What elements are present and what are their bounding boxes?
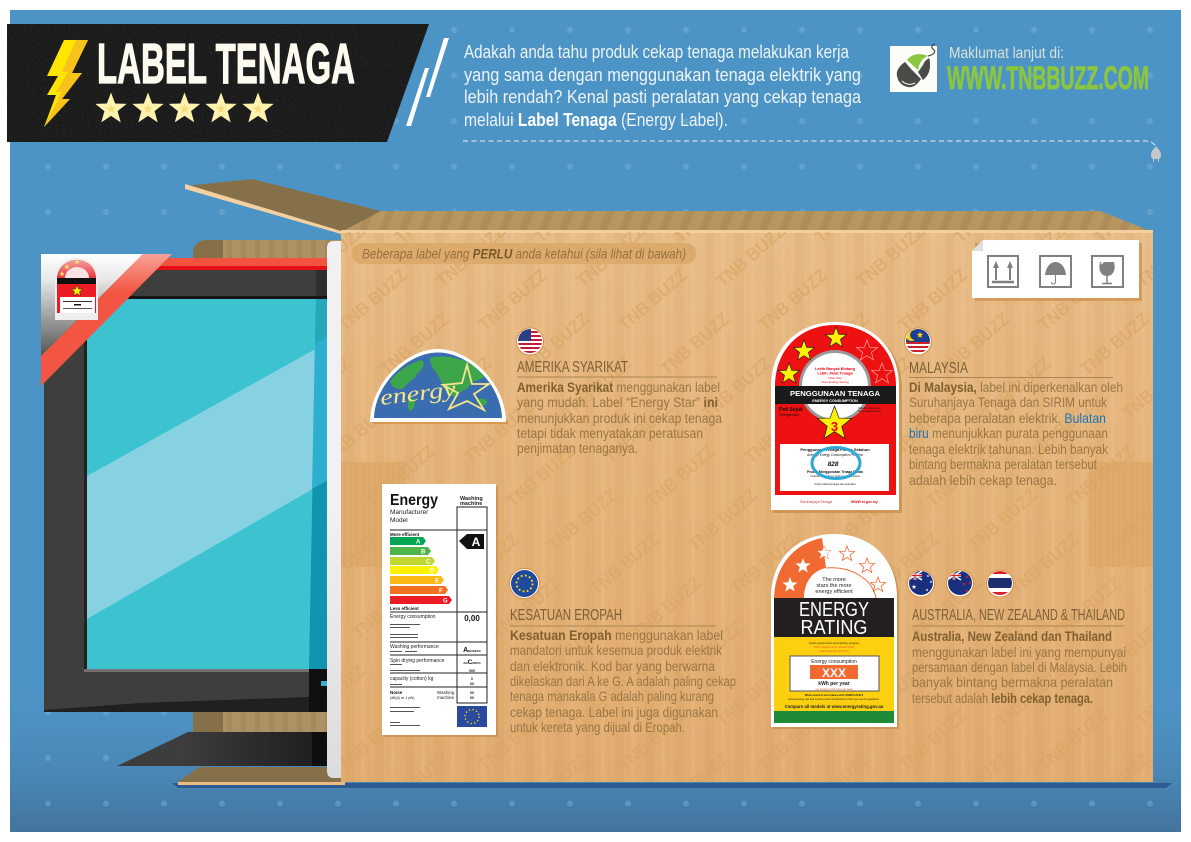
malaysia energy label: PENGGUNAAN TENAGA xyxy=(790,389,881,398)
australia energy rating label: stars the more xyxy=(816,583,852,589)
energy star label xyxy=(370,349,508,424)
EU energy label: machine xyxy=(437,695,455,700)
text: Malaysia xyxy=(909,360,1123,488)
text: Australia, New Zealand and Thailand: banyak bintang bermakna peralatan xyxy=(912,674,1113,690)
flag: New Zealand xyxy=(946,570,974,597)
flag: USA xyxy=(516,328,544,355)
malaysia energy label xyxy=(770,320,902,513)
text: Malaysia: biru menunjukkan purata penggunaan xyxy=(909,425,1108,441)
semicircle window: Lebih Jimat Tenaga xyxy=(817,372,853,376)
text: Australia, New Zealand and Thailand: persamaan dengan label di Malaysia. Lebih xyxy=(912,659,1127,675)
text: Kesatuan Eropah: mandatori untuk kesemua produk elektrik xyxy=(510,642,723,658)
website callout: Maklumat lanjut di: xyxy=(949,45,1064,62)
australia energy rating label: kWh per year xyxy=(818,681,850,687)
EU energy label: Noise xyxy=(390,690,403,695)
EU energy label: Manufacturer xyxy=(390,509,429,516)
television xyxy=(44,258,330,766)
efficiency bars A to G: G xyxy=(443,598,448,604)
slashes xyxy=(406,38,449,126)
australia energy rating label xyxy=(770,530,900,730)
text: Amerika Syarikat: AMERIKA SYARIKAT xyxy=(517,359,628,376)
text: Kesatuan Eropah: dikelaskan dari A ke G. A adalah paling cekap xyxy=(510,673,736,689)
australia energy rating label: RATING xyxy=(800,617,868,639)
dashed cord with plug xyxy=(463,141,1161,162)
text: Kesatuan Eropah: untuk kereta yang dijual di Eropah. xyxy=(510,719,685,735)
text: Australia, New Zealand and Thailand xyxy=(912,607,1127,706)
rating stars xyxy=(779,327,892,383)
text: Amerika Syarikat: Amerika Syarikat menggunakan label xyxy=(517,379,720,395)
semicircle window xyxy=(799,350,871,422)
text: Kesatuan Eropah: dan elektronik. Kod bar yang berwarna xyxy=(510,658,715,674)
EU energy label: machine xyxy=(460,501,482,507)
malaysia energy label: Average Energy Consumption Per Year xyxy=(806,453,864,457)
flag: EU xyxy=(510,568,540,598)
australia energy rating label: Actual energy use and running costs will depend on how you use the appliance. xyxy=(788,697,880,701)
australia energy rating label: A joint government and industry program xyxy=(809,641,860,645)
five stars rating xyxy=(95,92,274,122)
icon: keep dry umbrella xyxy=(1040,256,1071,287)
EU energy label: Washing performance xyxy=(390,644,439,650)
text: Amerika Syarikat: menunjukkan produk ini cekap tenaga xyxy=(517,410,722,426)
text: Kesatuan Eropah: tenaga manakala G adalah paling kurang xyxy=(510,688,714,704)
corner ribbon with mini label xyxy=(41,254,172,386)
text: Kesatuan Eropah: Kesatuan Eropah menggunakan label xyxy=(510,627,723,643)
text: Amerika Syarikat: yang mudah. Label “Energy Star” ini xyxy=(517,394,718,410)
malaysia energy label: Refrigerator xyxy=(779,413,800,417)
energy star logo: energy xyxy=(379,376,457,410)
EU energy label: More efficient xyxy=(390,532,420,537)
EU energy label: Energy xyxy=(390,492,438,509)
blue circle highlight xyxy=(812,448,860,478)
EU energy label: 0 xyxy=(471,677,473,681)
EU energy label: capacity (cotton) kg xyxy=(390,676,434,682)
australia energy rating label: energy efficient xyxy=(815,589,853,595)
malaysia energy label: 3 xyxy=(831,419,838,434)
tv screen xyxy=(87,299,330,669)
malaysia energy label: Untuk maklumat lanjut sila rujuk label xyxy=(814,483,856,486)
cardboard box front xyxy=(341,230,1153,782)
efficiency bars A to G: F xyxy=(439,588,443,594)
australia energy rating label: XXX xyxy=(822,666,846,680)
malaysia energy label: Suruhanjaya Tenaga xyxy=(800,500,832,504)
EU energy label: Model xyxy=(390,517,408,524)
EU energy label: Washing xyxy=(460,496,483,502)
semicircle window: More Star xyxy=(828,376,842,380)
malaysia energy label: 828 xyxy=(828,461,839,468)
malaysia energy label: Penggunaan Tenaga Purata Setahun xyxy=(800,447,870,452)
title banner xyxy=(7,24,429,142)
icon: computer mouse xyxy=(890,44,937,92)
EU energy label: A xyxy=(472,535,481,549)
flag: Australia xyxy=(908,570,935,597)
EU energy label: 0,00 xyxy=(464,614,480,623)
title: LABEL TENAGA xyxy=(97,32,355,96)
box back interior xyxy=(178,240,345,785)
website callout xyxy=(947,45,1149,96)
intro paragraph: Adakah anda tahu produk cekap tenaga melakukan kerja xyxy=(464,42,850,62)
EU energy label: ABCDEFG xyxy=(463,647,482,654)
text: Amerika Syarikat xyxy=(517,359,722,456)
malaysia energy label: Suhu sentiasa sama xyxy=(858,410,881,413)
map continents xyxy=(390,357,487,411)
malaysia energy label: WWW.st.gov.my xyxy=(851,500,878,504)
australia energy rating label: ENERGY xyxy=(799,599,869,621)
malaysia energy label: ENERGY CONSUMPTION xyxy=(812,399,858,403)
intro paragraph xyxy=(464,42,862,130)
mini malaysia label xyxy=(55,258,98,320)
open box flap xyxy=(185,179,381,234)
efficiency bars A to G: B xyxy=(421,550,426,556)
text: Amerika Syarikat: penjimatan tenaganya. xyxy=(517,440,638,456)
text: Kesatuan Eropah: KESATUAN EROPAH xyxy=(510,607,622,624)
malaysia energy label: Cuterbur maksimum xyxy=(858,407,881,410)
efficiency bars A to G: C xyxy=(426,560,431,566)
text: Australia, New Zealand and Thailand: tersebut adalah lebih cekap tenaga. xyxy=(912,690,1093,706)
text: Amerika Syarikat: tetapi tidak menyatakan peratusan xyxy=(517,425,703,441)
text: Malaysia: MALAYSIA xyxy=(909,360,969,377)
handling note with icons xyxy=(972,240,1142,301)
malaysia energy label: Cuterbur maksimum Suhu sentiasa sama xyxy=(810,474,860,478)
EU energy label: Energy consumption xyxy=(390,614,436,620)
icon: this way up xyxy=(988,256,1018,287)
subtitle pill: Beberapa label yang PERLU anda ketahui (sila lihat di bawah) xyxy=(362,246,686,262)
efficiency bars A to G: A xyxy=(416,540,421,546)
malaysia energy label: Produk Menggunakan Tenaga Purata xyxy=(807,470,863,474)
label grid xyxy=(390,507,487,703)
intro paragraph: lebih rendah? Kenal pasti peralatan yang cekap tenaga xyxy=(464,87,862,107)
efficiency bars A to G: E xyxy=(435,578,439,584)
text: Kesatuan Eropah: cekap tenaga. Label ini juga digunakan xyxy=(510,704,718,720)
tv side panel xyxy=(327,241,343,778)
australia energy rating label: When tested in accordance with AS/NZS 2442.2 xyxy=(805,693,864,697)
text: Kesatuan Eropah xyxy=(510,607,736,735)
text: Australia, New Zealand and Thailand: Australia, New Zealand dan Thailand xyxy=(912,628,1112,644)
intro paragraph: yang sama dengan menggunakan tenaga elektrik yang xyxy=(464,65,861,85)
EU energy label: Less efficient xyxy=(390,606,419,611)
EU energy label: 00 xyxy=(470,696,474,700)
EU energy label: (dB(A) re 1 pW) xyxy=(390,696,415,700)
EU energy label: 000 xyxy=(469,669,475,673)
semicircle window: More Energy Saving xyxy=(821,380,849,384)
icon: lightning bolt xyxy=(44,40,88,127)
malaysia energy label: Peti Sejuk xyxy=(779,407,803,413)
text: Malaysia: tenaga elektrik tahunan. Lebih banyak xyxy=(909,441,1109,457)
icon: fragile glass xyxy=(1092,256,1123,287)
australia energy rating label: Energy consumption xyxy=(811,659,857,665)
text: Malaysia: Di Malaysia, label ini diperkenalkan oleh xyxy=(909,379,1123,395)
efficiency bars A to G: D xyxy=(430,568,435,574)
box top face xyxy=(341,211,1153,232)
semicircle window: Lebih Banyak Bintang xyxy=(815,367,856,371)
intro paragraph: melalui Label Tenaga (Energy Label). xyxy=(464,110,728,130)
text: Malaysia: adalah lebih cekap tenaga. xyxy=(909,472,1057,488)
australia energy rating label: Compare all models at www.energyrating.gov.au xyxy=(785,704,884,709)
text: Malaysia: beberapa peralatan elektrik. Bulatan xyxy=(909,410,1106,426)
australia energy rating label: The more xyxy=(822,577,846,583)
text: Australia, New Zealand and Thailand: menggunakan label ini yang mempunyai xyxy=(912,644,1126,660)
tv bezel xyxy=(44,268,330,712)
EU energy label xyxy=(382,484,498,737)
text: Malaysia: Suruhanjaya Tenaga dan SIRIM untuk xyxy=(909,394,1108,410)
box shadow on floor xyxy=(172,783,1172,788)
EU energy label: Washing xyxy=(437,690,455,695)
EU energy label: ABCDEFG xyxy=(463,659,481,666)
EU energy label: 00 xyxy=(470,691,474,695)
tv stand xyxy=(117,732,330,766)
australia energy rating label: XXXX clothes dryer Model XXXX xyxy=(814,645,855,649)
australia energy rating label: Load capacity XXXX kg xyxy=(819,649,849,653)
EU energy label: Spin drying performance xyxy=(390,658,445,664)
eu mini flag xyxy=(457,706,487,727)
australia energy rating label: see program card notes per week xyxy=(815,688,853,691)
flag: Thailand xyxy=(986,570,1014,597)
flag: Malaysia xyxy=(904,328,932,355)
text: Malaysia: bintang bermakna peralatan tersebut xyxy=(909,456,1097,472)
EU energy label: 00 xyxy=(470,682,474,686)
efficiency bars A to G xyxy=(390,537,452,604)
